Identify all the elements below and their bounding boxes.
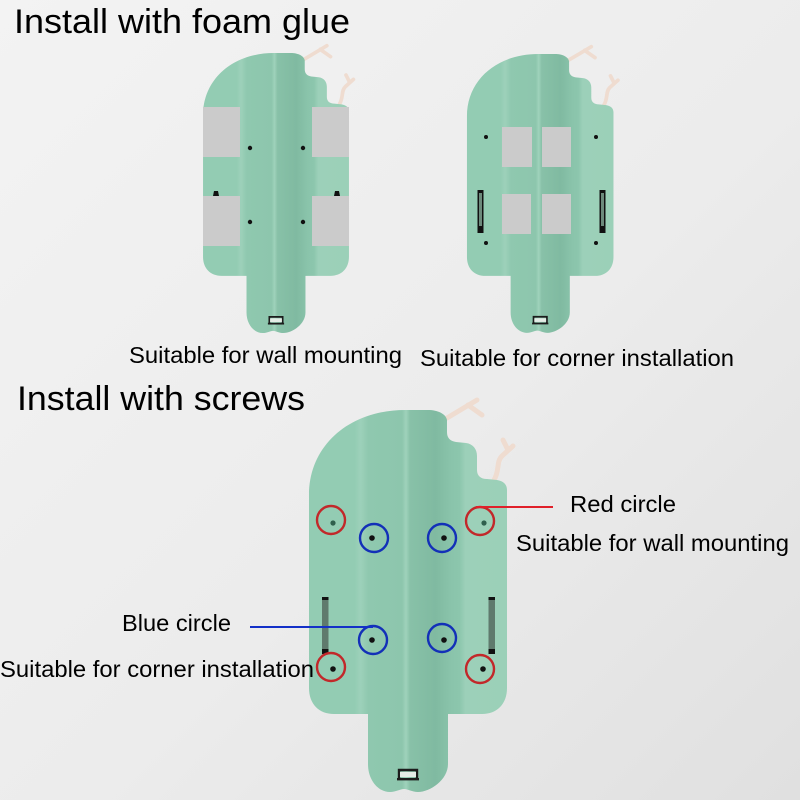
caption: corner installation: Suitable for corner installation <box>420 345 734 371</box>
slots <box>322 597 495 654</box>
leader line: blue circle <box>250 626 373 628</box>
panel: plate with screw positions <box>309 400 513 792</box>
panel: wall-mounted plate with foam glue <box>203 46 353 333</box>
label: blue circle: Blue circle <box>122 610 231 636</box>
label: red circle meaning: Suitable for wall mounting <box>516 530 789 556</box>
panel: corner-mounted plate with foam glue <box>467 47 618 333</box>
blue circles <box>359 524 456 654</box>
leader line: red circle <box>476 506 553 508</box>
foam pads: wall mounting <box>203 107 349 246</box>
title: install with screws: Install with screws <box>17 380 305 418</box>
title: install with foam glue: Install with foam glue <box>14 3 350 41</box>
screw holes <box>330 520 487 672</box>
label: red circle: Red circle <box>570 491 676 517</box>
screw holes: wall plate <box>213 146 340 224</box>
label: blue circle meaning: Suitable for corner installation <box>0 656 314 682</box>
caption: wall mounting: Suitable for wall mounting <box>129 342 402 368</box>
screw holes and slots: corner plate <box>478 135 606 245</box>
foam pads: corner installation <box>502 127 571 234</box>
red circles <box>317 506 494 683</box>
